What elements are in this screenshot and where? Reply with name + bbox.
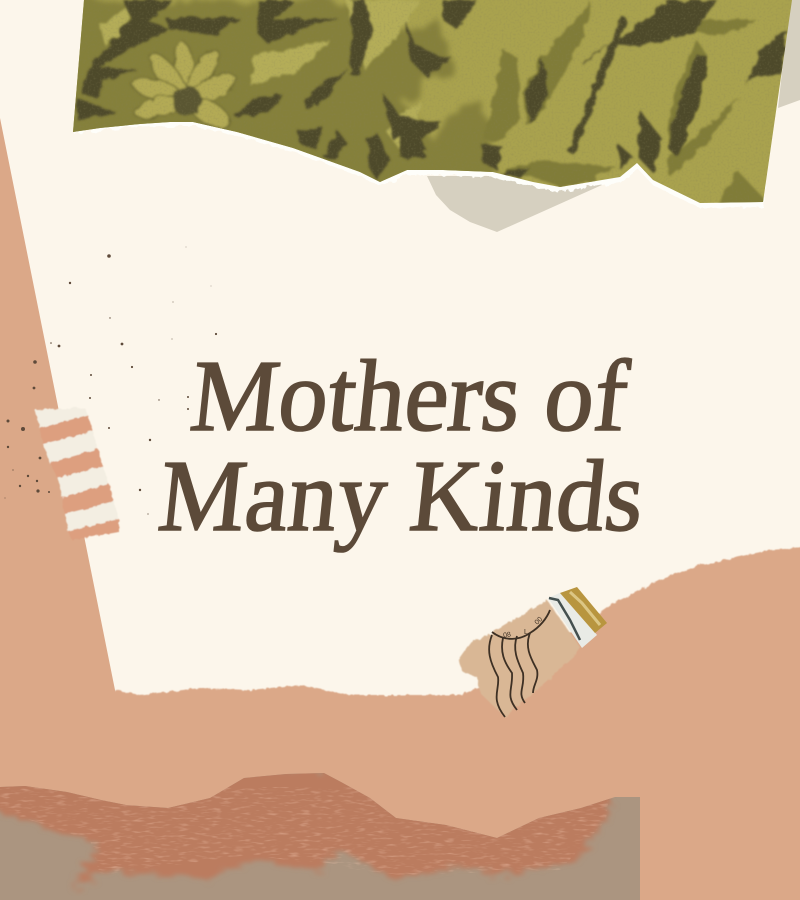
icon: postage stamp fragment: L (524, 629, 528, 636)
stamp white strip (548, 592, 597, 648)
paper grain (80, 0, 785, 181)
icon: postage stamp fragment: 00 (534, 616, 544, 626)
dark foliage (77, 0, 787, 180)
mid-tone foliage (73, 0, 498, 182)
postmark text: 08 (503, 631, 512, 640)
panel: copper-brushed torn paper (0, 765, 650, 900)
panel: white torn rim of floral paper (73, 100, 770, 208)
panel: floral paper (60, 0, 800, 215)
title (154, 340, 649, 553)
light foliage patches (100, 0, 420, 150)
icon: daisy flower (132, 41, 236, 130)
icon: postage stamp fragment (458, 587, 607, 717)
postmark lines (489, 610, 550, 717)
title: Many Kinds (154, 440, 649, 553)
panel: grey paper behind the floral paper (427, 0, 800, 232)
icon: striped washi tape (35, 408, 119, 540)
copper brush texture (0, 770, 620, 890)
icon: ink speckles (4, 247, 217, 515)
copper glints (0, 787, 608, 874)
stamp paper (458, 600, 580, 717)
title: Mothers of (186, 340, 634, 453)
stamp gold strip (560, 587, 607, 633)
